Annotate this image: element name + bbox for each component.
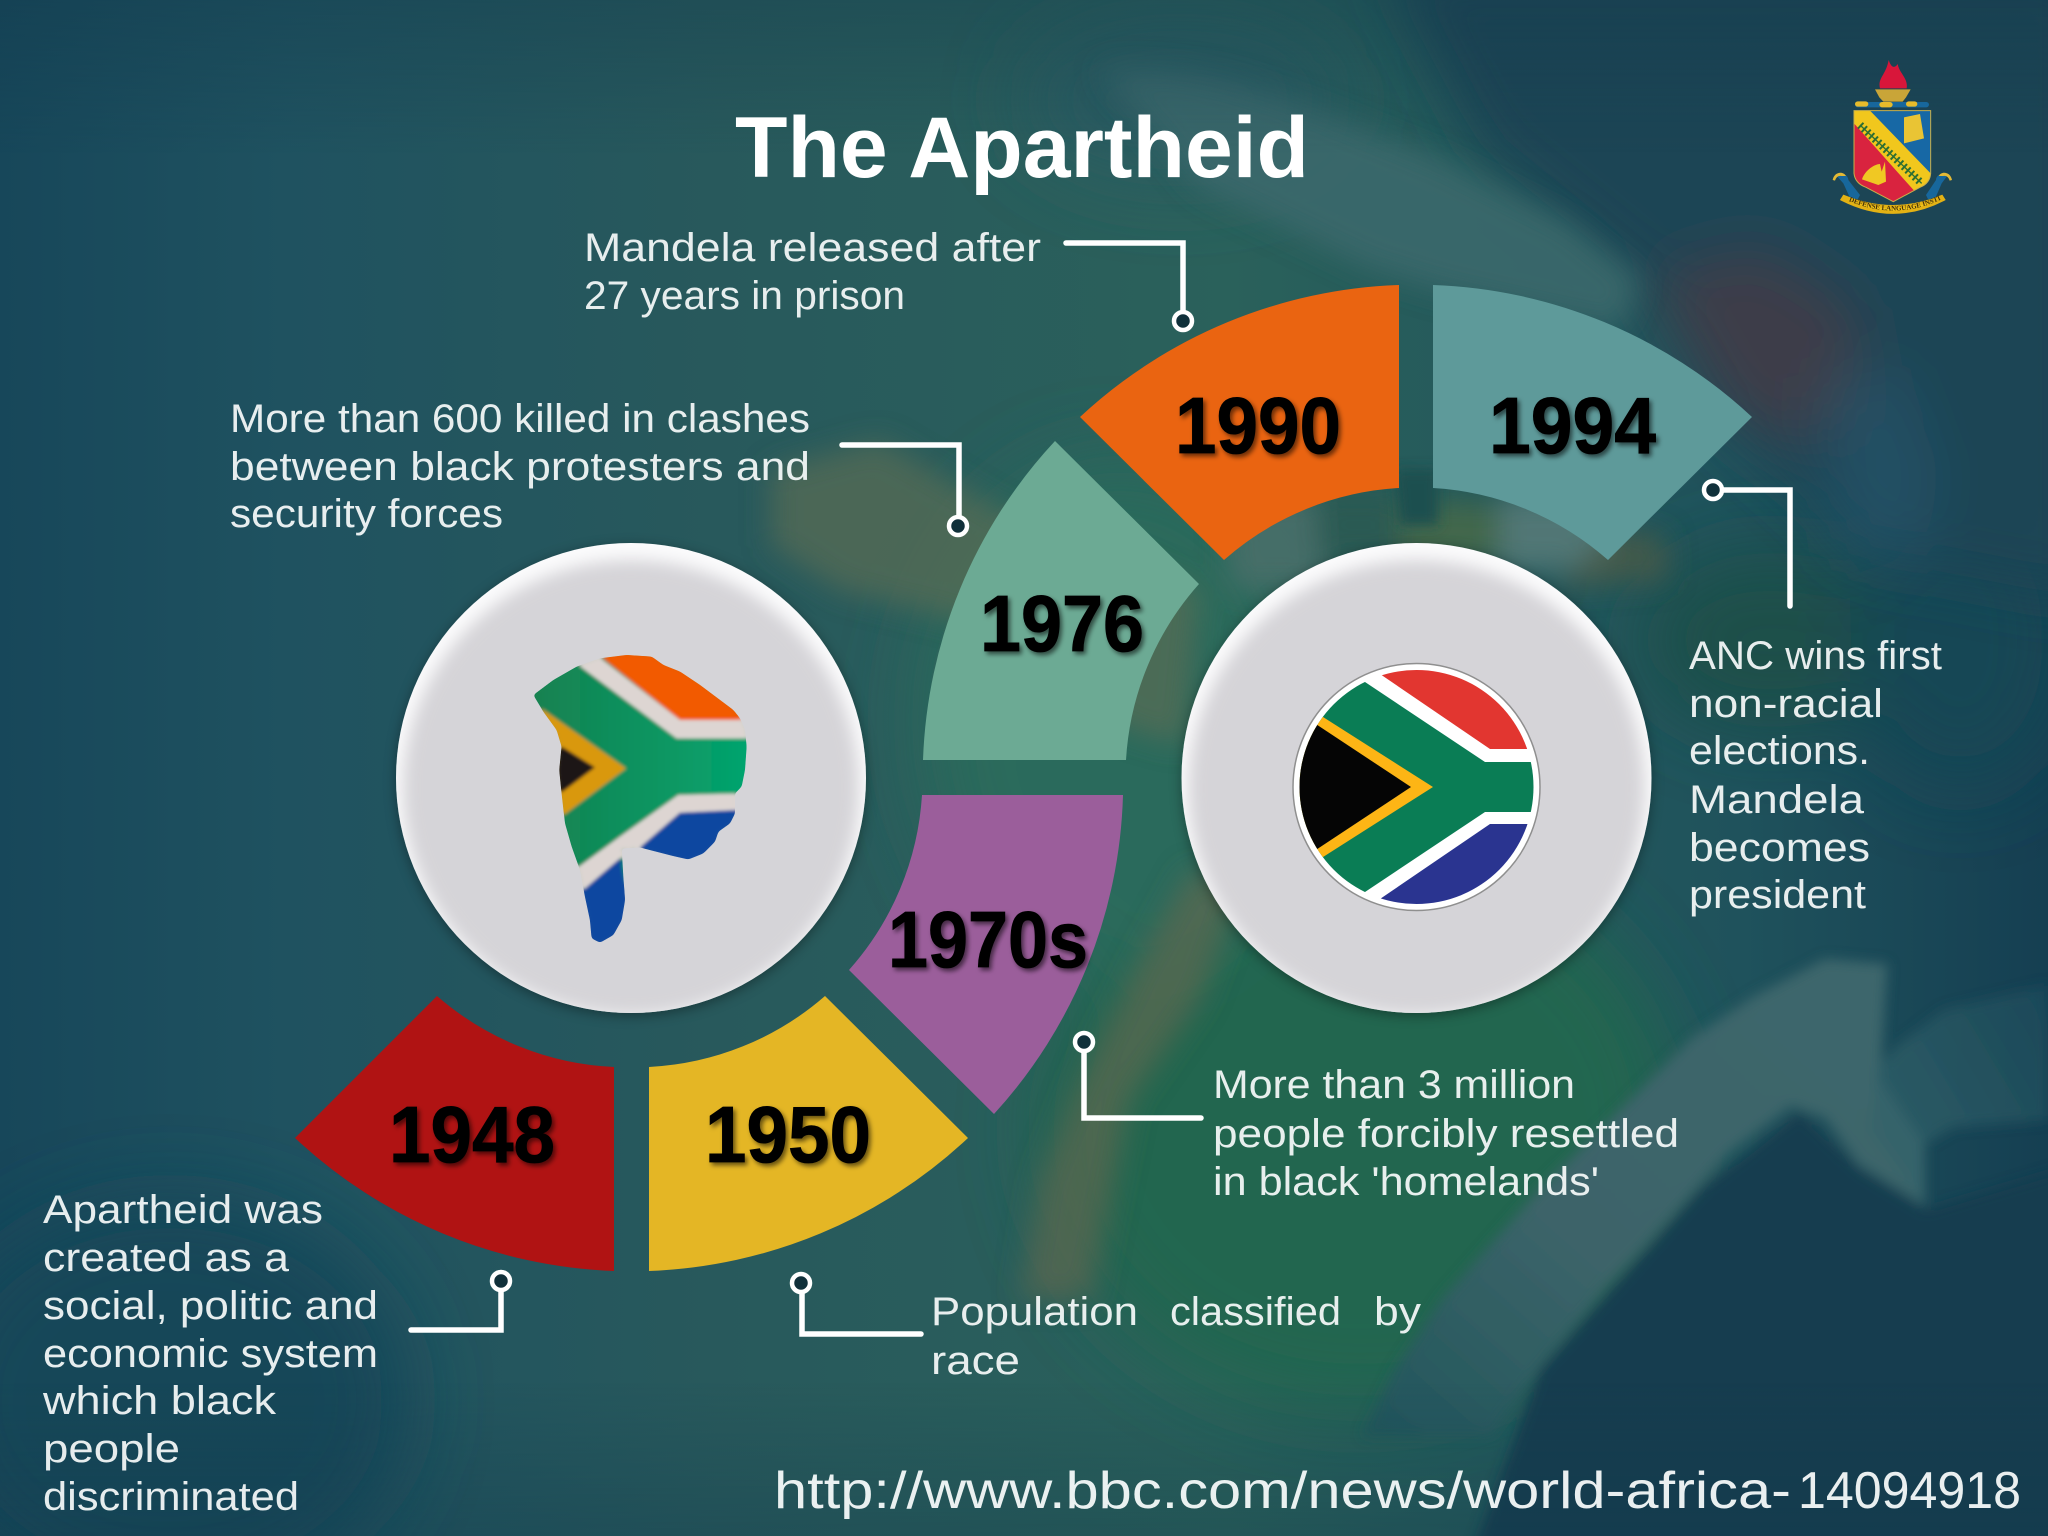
callout: 1950 population classified: [792, 1274, 1421, 1383]
segment: 1990: 1990: [1175, 381, 1341, 470]
callout: 1976 killed in clashes: [230, 397, 967, 536]
callout: 1948 apartheid created: [42, 1188, 510, 1519]
callout: 1970s forcibly resettled: people forcibly resettled: [1213, 1112, 1679, 1156]
callout: 1994 ANC wins: ANC wins first: [1689, 634, 1942, 678]
callout: 1970s forcibly resettled: More than 3 million: [1213, 1063, 1575, 1107]
icon: Defense Language Institute crest: [1832, 60, 1952, 214]
callout: 1948 apartheid created: created as a: [43, 1236, 290, 1280]
callout: 1950 population classified: race: [931, 1339, 1020, 1383]
source URL: http://www.bbc.com/news/world-africa-: [774, 1462, 1791, 1520]
callout: 1976 killed in clashes: security forces: [230, 492, 503, 536]
panel: right disc with round flag: [1182, 543, 1652, 1016]
callout: 1990 Mandela released: 27 years in prison: [584, 274, 905, 318]
icon: round South African flag: [1292, 662, 1541, 912]
segment: 1976: 1976: [980, 579, 1144, 668]
segment: 1976: [923, 441, 1199, 760]
icon: Defense Language Institute crest: DEFENSE LANGUAGE INSTITUTE: [1848, 196, 1941, 210]
segment: 1948: [295, 996, 614, 1271]
callout: 1950 population classified: Population: [931, 1290, 1138, 1334]
segment: 1970s: 1970s: [888, 895, 1088, 984]
panel: left disc with thumbs-down flag: [396, 543, 866, 1016]
source URL: 14094918: [1798, 1462, 2021, 1520]
callout: 1948 apartheid created: people: [43, 1427, 180, 1471]
callout: 1948 apartheid created: discriminated: [43, 1475, 299, 1519]
segment: 1994: 1994: [1489, 381, 1656, 470]
callout: 1990 Mandela released: [584, 226, 1192, 330]
callout: 1948 apartheid created: which black: [42, 1379, 277, 1423]
callout: 1976 killed in clashes: More than 600 killed in clashes: [230, 397, 810, 441]
icon: thumbs-down South African flag: [534, 655, 746, 942]
callout: 1994 ANC wins: becomes: [1689, 826, 1870, 870]
callout: 1948 apartheid created: Apartheid was: [43, 1188, 323, 1232]
segment: 1970s: [849, 795, 1123, 1114]
segment: 1948: 1948: [389, 1090, 555, 1179]
callout: 1994 ANC wins: Mandela: [1689, 778, 1865, 822]
callout: 1970s forcibly resettled: [1075, 1033, 1679, 1204]
segment: 1950: 1950: [705, 1090, 871, 1179]
callout: 1948 apartheid created: social, politic and: [43, 1284, 378, 1328]
callout: 1948 apartheid created: economic system: [43, 1332, 378, 1376]
callout: 1994 ANC wins: elections.: [1689, 729, 1870, 773]
callout: 1970s forcibly resettled: in black 'homelands': [1213, 1160, 1599, 1204]
callout: 1950 population classified: by: [1374, 1290, 1421, 1334]
callout: 1950 population classified: classified: [1170, 1290, 1341, 1334]
callout: 1994 ANC wins: non-racial: [1689, 682, 1883, 726]
segment: 1994: [1433, 285, 1752, 560]
title: The Apartheid: [735, 100, 1309, 196]
callout: 1990 Mandela released: Mandela released after: [584, 226, 1041, 270]
callout: 1994 ANC wins: president: [1689, 873, 1866, 917]
callout: 1976 killed in clashes: between black protesters and: [230, 445, 810, 489]
segment: 1950: [649, 996, 968, 1271]
callout: 1994 ANC wins: [1689, 481, 1942, 917]
segment: 1990: [1080, 285, 1399, 560]
